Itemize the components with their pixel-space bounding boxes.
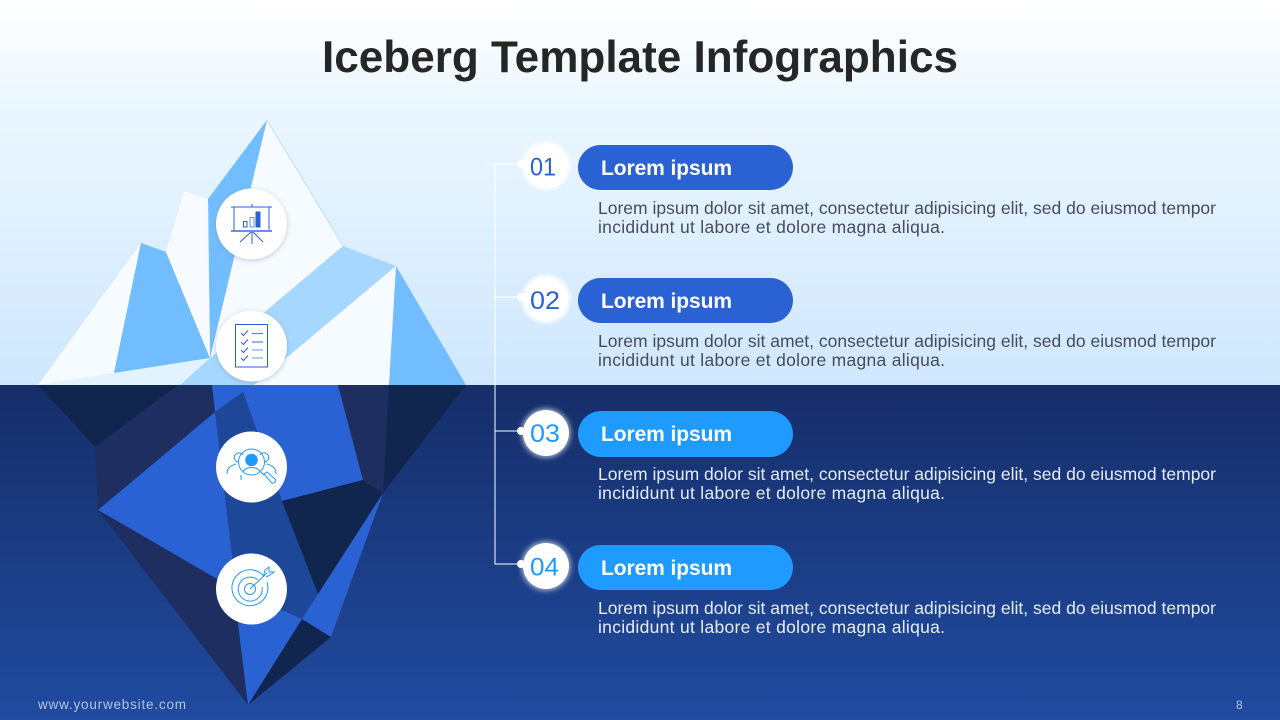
pill heading 01: Lorem ipsum (601, 157, 732, 180)
step 01 (517, 140, 1216, 237)
step 02 (517, 274, 1216, 370)
title: Iceberg Template Infographics (322, 33, 958, 82)
iceberg: below water (38, 385, 466, 705)
pill heading 03 (578, 411, 793, 457)
pill heading 04 (578, 545, 793, 590)
footer: page number: 8 (1236, 698, 1243, 712)
body text 04: Lorem ipsum dolor sit amet, consectetur adipisicing elit, sed do eiusmod tempor (598, 598, 1216, 618)
iceberg: above water (38, 120, 466, 385)
body text 01 (598, 198, 1216, 237)
number badge 04 (517, 541, 571, 591)
body text 02 (598, 331, 1216, 370)
number badge 02: 02 (530, 287, 560, 315)
connector lines (495, 164, 520, 564)
pill heading 02 (578, 278, 793, 323)
body text 03: Lorem ipsum dolor sit amet, consectetur adipisicing elit, sed do eiusmod tempor (598, 464, 1216, 484)
body text 02: Lorem ipsum dolor sit amet, consectetur adipisicing elit, sed do eiusmod tempor (598, 331, 1216, 351)
pill heading 02: Lorem ipsum (601, 290, 732, 313)
number badge 02 (517, 274, 572, 324)
number badge 04: 04 (530, 554, 559, 582)
body text 04 (598, 598, 1216, 637)
body text 01: Lorem ipsum dolor sit amet, consectetur adipisicing elit, sed do eiusmod tempor (598, 198, 1216, 218)
number badge 03: 03 (530, 420, 560, 448)
number badge 01: 01 (530, 154, 556, 182)
number badge 01 (517, 140, 572, 192)
number badge 03 (517, 408, 571, 458)
icon: people search (216, 432, 287, 502)
background: sea (0, 385, 1280, 720)
step 03 (517, 408, 1216, 503)
icon: target with arrow (216, 554, 287, 624)
pill heading 01 (578, 145, 793, 190)
body text 02: incididunt ut labore et dolore magna aliqua. (598, 350, 945, 370)
body text 03 (598, 464, 1216, 503)
pill heading 03: Lorem ipsum (601, 423, 732, 446)
pill heading 04: Lorem ipsum (601, 557, 732, 580)
icon: presentation board (216, 188, 287, 260)
icon: checklist (216, 310, 287, 382)
footer: website: www.yourwebsite.com (37, 697, 186, 712)
body text 04: incididunt ut labore et dolore magna aliqua. (598, 617, 945, 637)
step 04 (517, 541, 1216, 637)
body text 03: incididunt ut labore et dolore magna aliqua. (598, 483, 945, 503)
background: sky (0, 0, 1280, 385)
body text 01: incididunt ut labore et dolore magna aliqua. (598, 217, 945, 237)
